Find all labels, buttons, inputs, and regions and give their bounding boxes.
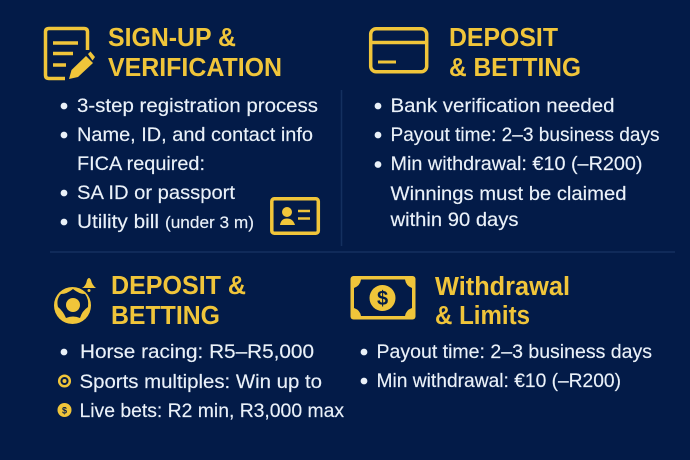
icon: form with pencil <box>46 28 95 79</box>
heading: sign-up and verification <box>108 24 282 82</box>
list: payout and minimum: Payout time: 2–3 business days <box>376 341 652 363</box>
heading: deposit and betting: DEPOSIT & <box>111 272 246 300</box>
list: registration requirements <box>61 95 318 233</box>
list: registration requirements: 3-step registration process <box>77 95 318 117</box>
list: betting limits: Horse racing: R5–R5,000 <box>80 341 314 363</box>
heading: deposit and betting <box>449 24 581 82</box>
icon: coin bullet <box>58 403 72 417</box>
list: bank and payout details <box>375 95 660 231</box>
panel: deposit and betting, top right <box>371 24 660 231</box>
heading: sign-up and verification: SIGN-UP & <box>108 24 236 52</box>
icon: ball and bell <box>54 278 96 324</box>
list: bank and payout details: Bank verification needed <box>390 95 614 117</box>
list: registration requirements: SA ID or passport <box>77 182 236 204</box>
list: registration requirements: FICA required: <box>77 153 205 175</box>
panel: sign-up and verification <box>46 24 318 233</box>
icon: coin bullet: $ <box>62 406 67 416</box>
list: bank and payout details: Min withdrawal: €10 (–R200) <box>390 153 642 175</box>
list: bank and payout details: Winnings must be claimed <box>390 183 626 205</box>
heading: sign-up and verification: VERIFICATION <box>108 54 282 82</box>
list: registration requirements: Utility bill <box>77 211 159 233</box>
list: registration requirements: (under 3 m) <box>165 213 254 232</box>
heading: withdrawal and limits: Withdrawal <box>435 273 570 301</box>
list: registration requirements: Name, ID, and contact info <box>77 124 313 146</box>
list: bank and payout details: within 90 days <box>389 209 519 231</box>
icon: banknote <box>350 276 416 320</box>
heading: deposit and betting: DEPOSIT <box>449 24 558 52</box>
icon: ID card <box>272 199 318 233</box>
list: betting limits: Live bets: R2 min, R3,000 max <box>80 400 344 422</box>
icon: banknote: $ <box>377 288 388 310</box>
heading: deposit and betting <box>111 272 246 330</box>
list: payout and minimum: Min withdrawal: €10 (–R200) <box>376 370 621 392</box>
heading: withdrawal and limits <box>435 273 570 330</box>
panel: withdrawal and limits <box>350 273 652 392</box>
list: betting limits: Sports multiples: Win up to <box>80 371 322 393</box>
list: payout and minimum <box>361 341 652 392</box>
panel: deposit and betting, bottom left <box>54 272 344 422</box>
heading: deposit and betting: & BETTING <box>449 54 581 82</box>
heading: withdrawal and limits: & Limits <box>435 302 530 330</box>
icon: chip bullet <box>59 376 70 386</box>
list: bank and payout details: Payout time: 2–3 business days <box>390 124 660 146</box>
heading: deposit and betting: BETTING <box>111 302 220 330</box>
list: betting limits <box>58 341 344 422</box>
icon: credit card <box>371 29 427 72</box>
